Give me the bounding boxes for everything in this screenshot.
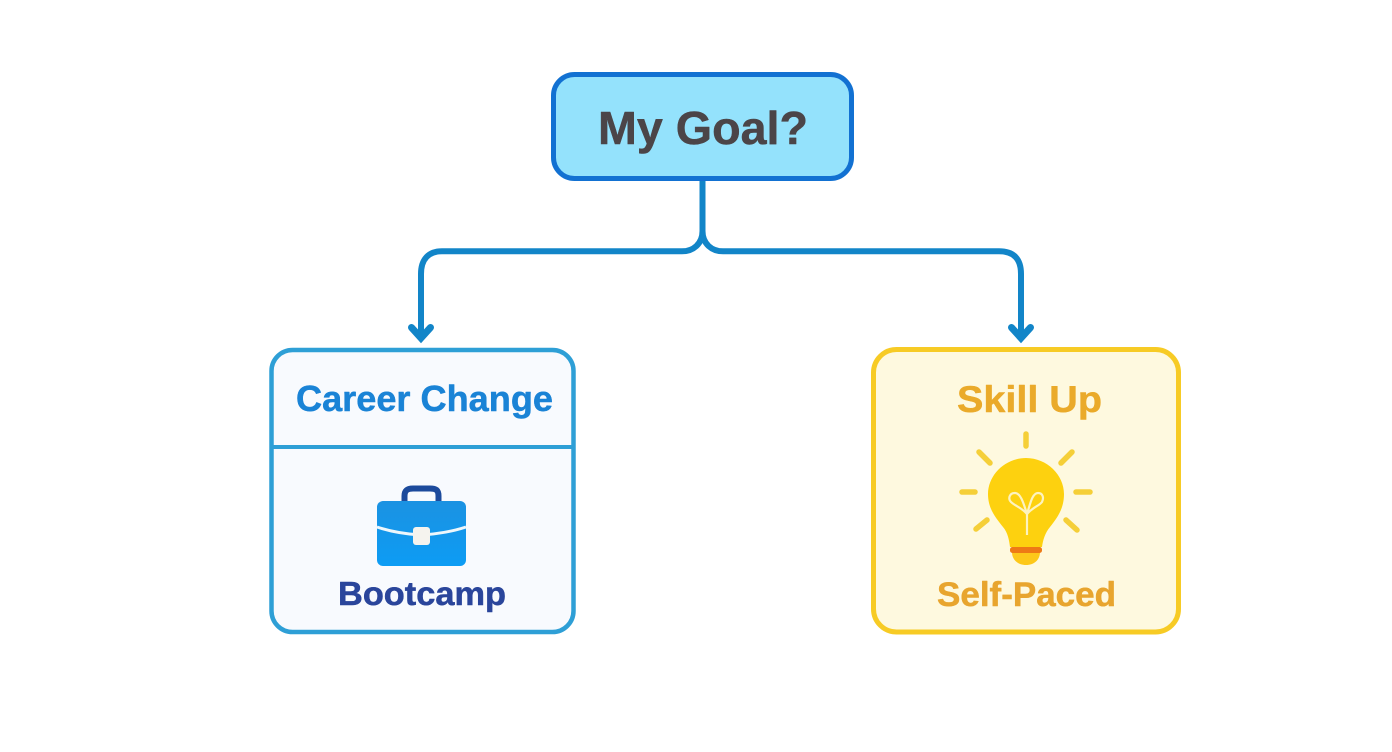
connector: goal to both options xyxy=(412,180,1030,338)
label: Self-Paced: Self-Paced xyxy=(937,576,1116,614)
label: Bootcamp: Bootcamp xyxy=(338,575,506,612)
goal box xyxy=(554,74,852,178)
arrow: left xyxy=(412,328,430,338)
heading: My Goal?: My Goal? xyxy=(598,102,808,154)
arrow: right xyxy=(1012,328,1030,338)
panel: career change xyxy=(272,350,574,632)
heading: Career Change: Career Change xyxy=(296,378,553,419)
icon: briefcase xyxy=(377,488,466,566)
icon: light bulb xyxy=(962,434,1090,565)
panel: skill up xyxy=(874,350,1178,632)
heading: Skill Up: Skill Up xyxy=(957,379,1102,420)
